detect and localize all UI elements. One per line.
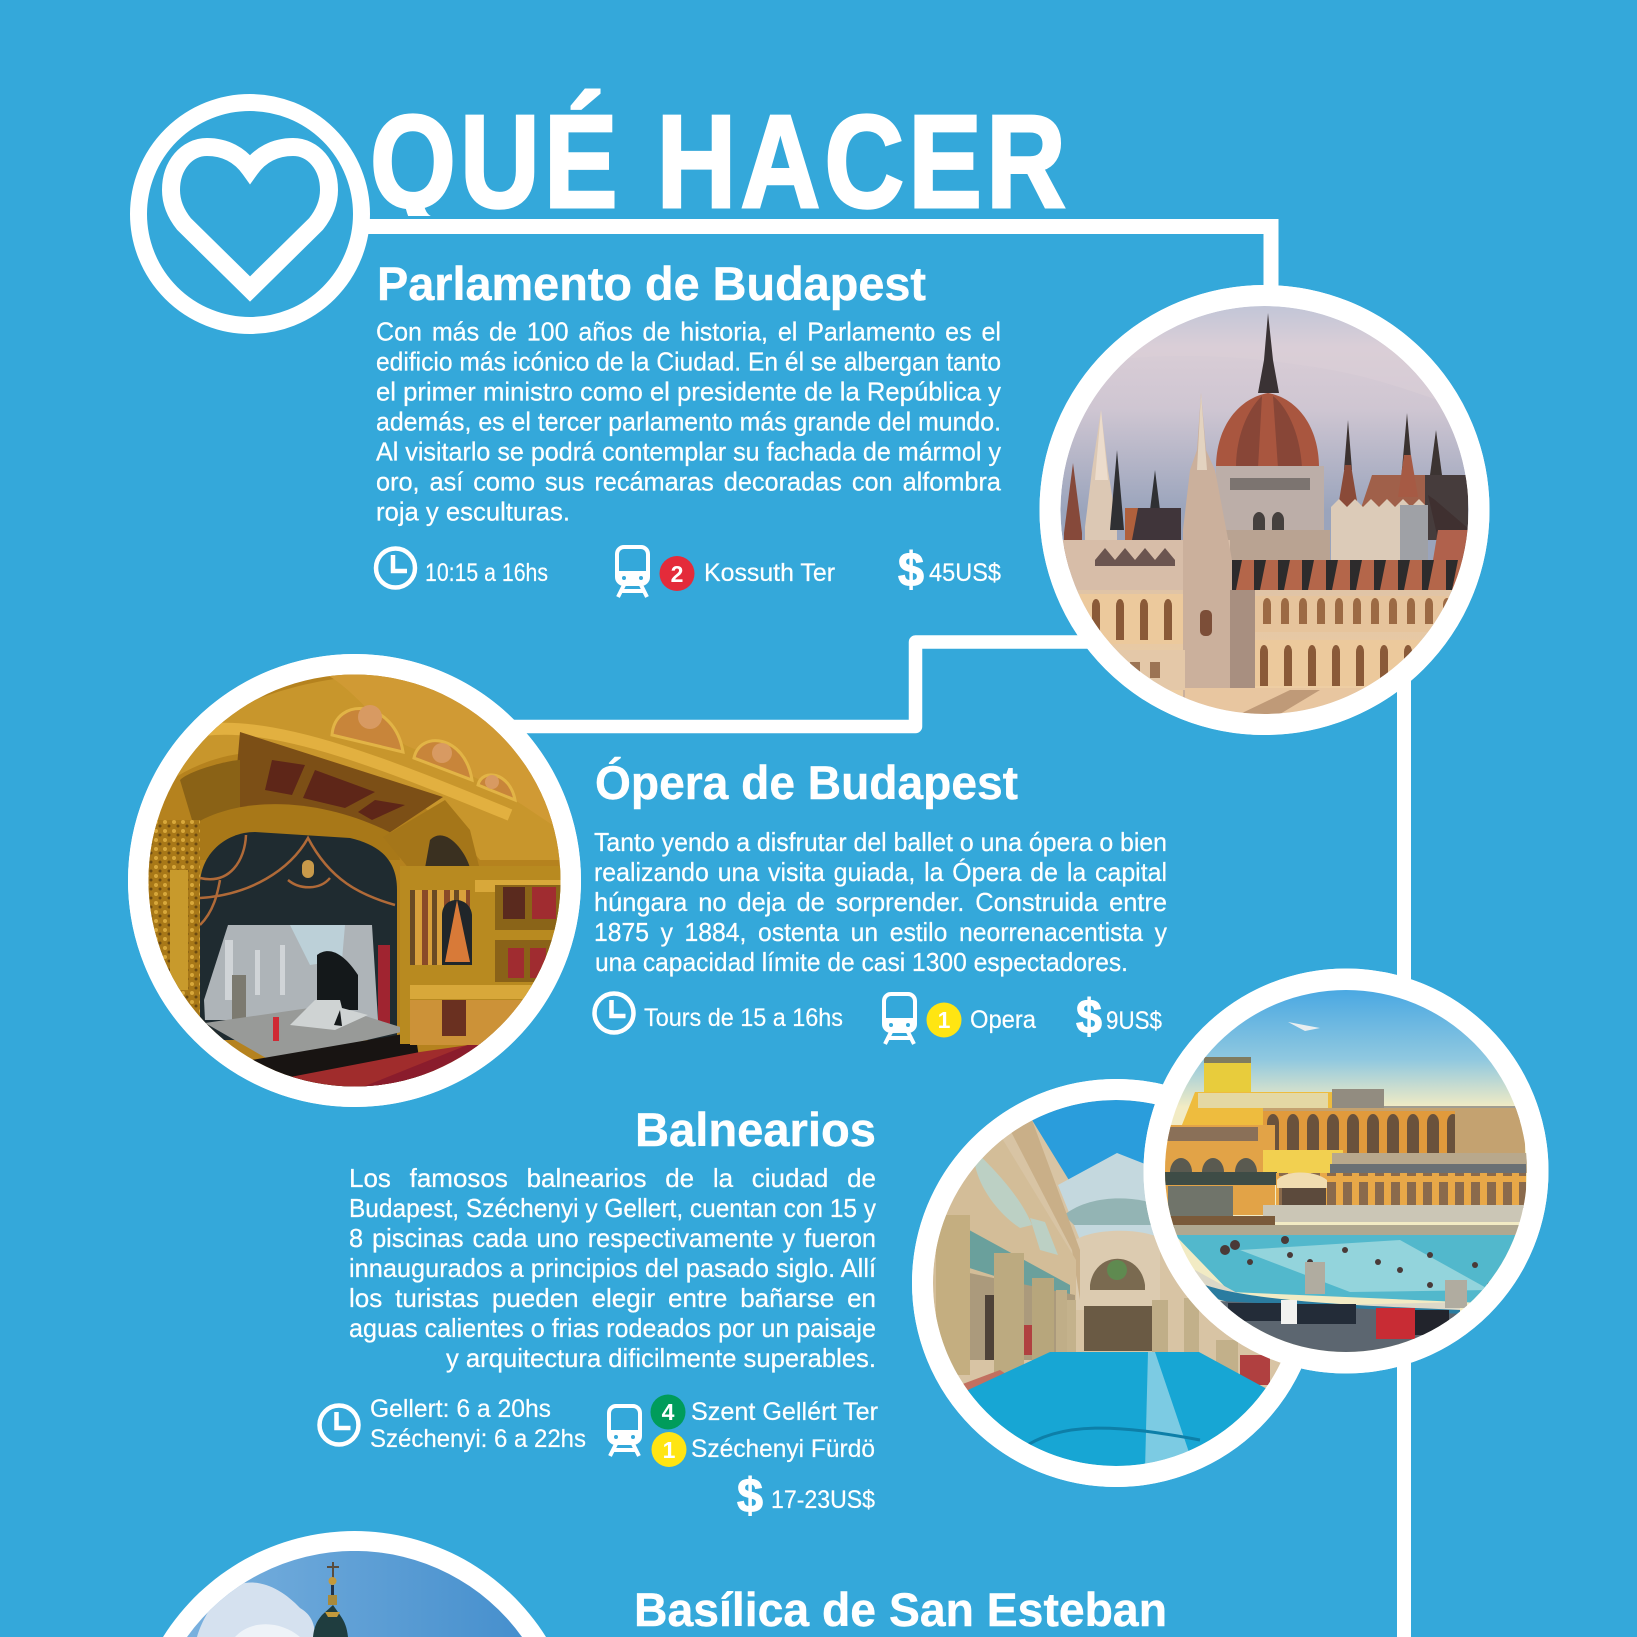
text block: Balnearios: innaugurados a principios del pasado siglo. Allí — [349, 1253, 877, 1283]
text block: Ópera: realizando una visita guiada, la Ópera de la capital — [594, 857, 1167, 887]
metro line badge 4: 4 — [662, 1399, 675, 1425]
icon: heart in circle — [138, 102, 362, 326]
text block: Ópera: 1875 y 1884, ostenta un estilo neorrenacentista y — [594, 917, 1167, 947]
text block: Parlamento: oro, así como sus recámaras decoradas con alfombra — [376, 466, 1002, 496]
icon: dollar: $ — [898, 544, 924, 597]
icon: dollar: $ — [737, 1470, 763, 1523]
stations — [691, 1398, 878, 1463]
heading: Basílica de San Esteban: Basílica de San Esteban — [634, 1584, 1167, 1637]
metro line badge 1: 1 — [938, 1007, 951, 1033]
text block: Ópera — [594, 827, 1167, 977]
metro line badge 1 — [652, 1432, 686, 1467]
heading: Ópera: Ópera de Budapest — [595, 755, 1018, 810]
heading: Balnearios: Balnearios — [635, 1104, 876, 1157]
station: Kossuth Ter — [704, 559, 835, 587]
hours: 10:15 a 16hs — [425, 559, 548, 587]
text block: Parlamento: Al visitarlo se podrá contemplar su fachada de mármol y — [376, 436, 1001, 466]
heading: Parlamento: Parlamento de Budapest — [377, 258, 926, 311]
price: 17-23US$ — [771, 1486, 875, 1514]
text block: Ópera: Tanto yendo a disfrutar del ballet o una ópera o bien — [594, 827, 1167, 857]
connector lines — [360, 226, 1404, 1637]
station: Opera — [970, 1006, 1036, 1034]
photo: Gellért baths — [912, 1079, 1320, 1487]
stations: Széchenyi Fürdö — [691, 1435, 875, 1463]
icon: clock — [376, 548, 415, 588]
hours — [370, 1395, 586, 1453]
stations: Szent Gellért Ter — [691, 1398, 878, 1426]
hours: Széchenyi: 6 a 22hs — [370, 1425, 586, 1453]
text block: Balnearios: los turistas pueden elegir entre bañarse en — [349, 1283, 876, 1313]
text block: Ópera: una capacidad límite de casi 1300 espectadores. — [595, 947, 1128, 977]
photo: Ópera — [128, 654, 581, 1107]
text block: Parlamento: Con más de 100 años de historia, el Parlamento es el — [376, 316, 1001, 346]
text block: Parlamento: roja y esculturas. — [376, 496, 570, 526]
icon: clock — [320, 1406, 358, 1444]
metro line badge 1 — [926, 1002, 962, 1038]
metro line badge 2: 2 — [671, 561, 683, 587]
photo: Parlamento — [1040, 285, 1490, 735]
icon: clock — [594, 994, 634, 1032]
photo: Széchenyi baths — [1144, 968, 1548, 1374]
metro line badge 2 — [660, 556, 694, 591]
price: 9US$ — [1106, 1007, 1162, 1035]
text block: Balnearios: Los famosos balnearios de la ciudad de — [349, 1163, 876, 1193]
hours: Tours de 15 a 16hs — [644, 1004, 843, 1032]
panel: Ópera de Budapest — [594, 755, 1167, 1044]
icon: train — [884, 994, 915, 1044]
icon: train — [609, 1406, 640, 1456]
panel: Parlamento de Budapest — [376, 258, 1002, 597]
text block: Balnearios: 8 piscinas cada uno respectivamente y fueron — [349, 1223, 876, 1253]
icon: dollar: $ — [1076, 991, 1102, 1044]
metro line badge 1: 1 — [663, 1437, 676, 1463]
panel: Balnearios — [320, 1104, 878, 1523]
text block: Balnearios: y arquitectura dificilmente superables. — [446, 1343, 876, 1373]
metro line badge 4 — [650, 1394, 686, 1430]
text block: Parlamento — [376, 316, 1002, 526]
text block: Parlamento: edificio más icónico de la Ciudad. En él se albergan tanto — [376, 346, 1001, 376]
text block: Parlamento: además, es el tercer parlamento más grande del mundo. — [376, 406, 1001, 436]
hours: Gellert: 6 a 20hs — [370, 1395, 551, 1423]
photo: Basílica — [148, 1531, 568, 1637]
price: 45US$ — [929, 559, 1001, 587]
text block: Balnearios — [349, 1163, 877, 1373]
text block: Balnearios: Budapest, Széchenyi y Gellert, cuentan con 15 y — [349, 1193, 876, 1223]
icon: train — [617, 547, 648, 597]
text block: Ópera: húngara no deja de sorprender. Construida entre — [594, 887, 1167, 917]
title: QUÉ HACER — [370, 88, 1070, 235]
text block: Parlamento: el primer ministro como el presidente de la República y — [376, 376, 1001, 406]
text block: Balnearios: aguas calientes o frias rodeados por un paisaje — [349, 1313, 876, 1343]
